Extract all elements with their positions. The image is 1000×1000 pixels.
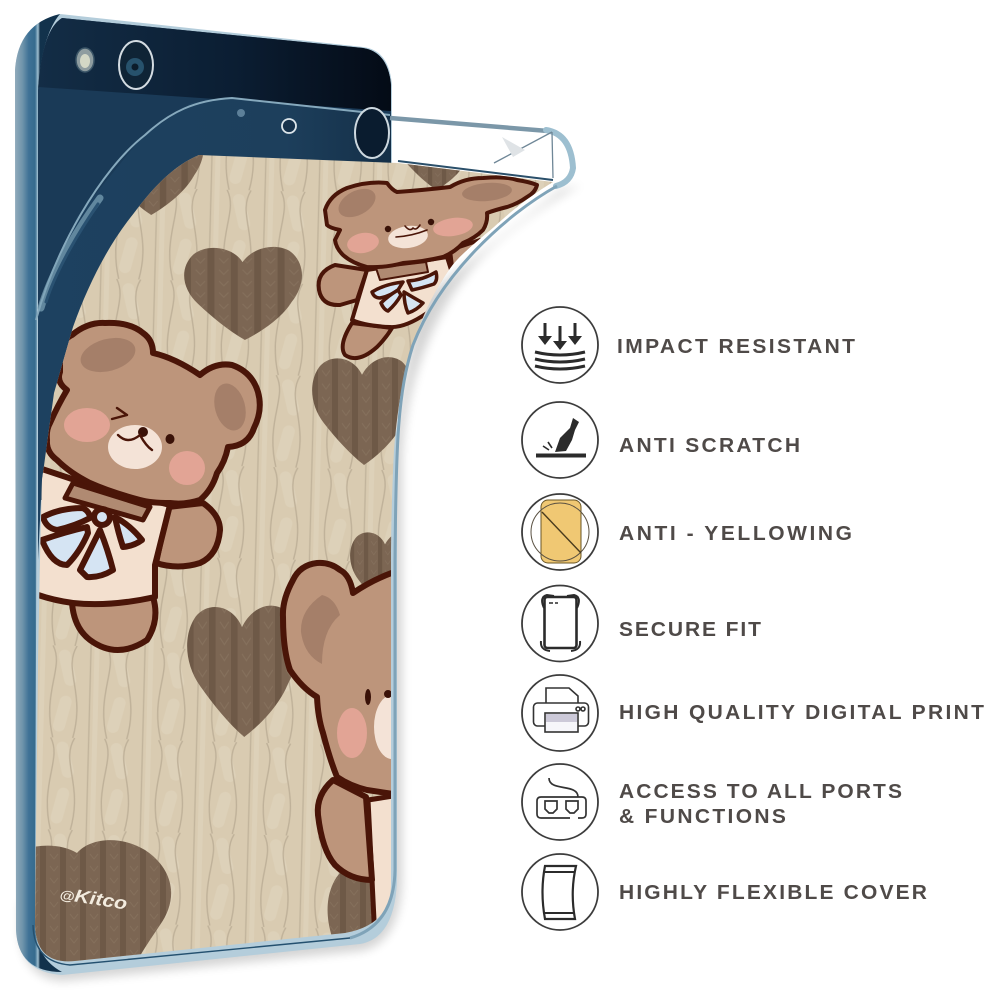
- shirt: [369, 795, 391, 924]
- muzzle: [374, 695, 410, 759]
- leg: [343, 323, 392, 358]
- bear small top right: [319, 177, 537, 358]
- small case hole: [282, 119, 296, 133]
- head: [325, 177, 537, 267]
- corner fold lines: [494, 132, 553, 178]
- heart bottom right: [328, 873, 376, 934]
- phone dark top band: [38, 18, 391, 111]
- icon: scratch: [522, 402, 598, 478]
- feature: secure fit: [522, 586, 761, 662]
- muzzle: [108, 425, 162, 469]
- label: ANTI - YELLOWING: [619, 522, 852, 545]
- flash centre: [80, 54, 90, 68]
- grey fold: [502, 137, 525, 157]
- right arm: [450, 240, 480, 275]
- right edge rim: [350, 186, 557, 938]
- case corner: [546, 130, 573, 186]
- labels: & FUNCTIONS: [619, 805, 786, 828]
- bottom rim: [33, 925, 350, 965]
- ears inner: [338, 189, 376, 217]
- labels: ACCESS TO ALL PORTS: [619, 780, 902, 803]
- heart small right: [350, 532, 392, 584]
- leg: [72, 597, 155, 650]
- brand mark: @Kitco: [58, 883, 129, 914]
- bear large left: [30, 323, 260, 650]
- eyes and nose: [385, 226, 391, 232]
- icon: flexible cover: [522, 854, 598, 930]
- eye: [365, 689, 371, 705]
- label: ANTI SCRATCH: [619, 434, 800, 457]
- camera cut-out: [355, 108, 389, 158]
- feature: impact resistant: [522, 307, 856, 383]
- feature: flexible: [522, 854, 927, 930]
- mouth: [396, 225, 427, 237]
- head: [283, 563, 400, 795]
- phone body lower: [38, 18, 391, 500]
- cheek: [337, 708, 367, 758]
- case print: [35, 155, 553, 962]
- left arm: [319, 265, 367, 305]
- icon: ports: [522, 764, 598, 840]
- heart top right: [408, 164, 460, 187]
- case light dot: [237, 109, 245, 117]
- icon: yellowing: [522, 494, 598, 570]
- cheeks: [347, 232, 379, 254]
- shirt: [30, 465, 170, 604]
- arm: [318, 780, 372, 880]
- bow: [372, 272, 437, 313]
- bow: [42, 508, 142, 577]
- nose: [138, 427, 148, 437]
- side strip: [15, 14, 62, 972]
- camera lens: [119, 41, 153, 89]
- knit background: [35, 155, 553, 962]
- case right and bottom rim: [33, 186, 557, 965]
- label: HIGHLY FLEXIBLE COVER: [619, 881, 927, 904]
- heart bottom left: [30, 840, 171, 965]
- print top edge line: [398, 161, 553, 180]
- cheeks: [64, 408, 110, 442]
- icon: phone fit: [522, 586, 598, 662]
- heart centre lower: [187, 606, 298, 737]
- wink and mouth: [112, 408, 152, 450]
- label: IMPACT RESISTANT: [617, 335, 856, 358]
- heart right: [312, 357, 413, 465]
- feature list: [522, 307, 984, 930]
- label: HIGH QUALITY DIGITAL PRINT: [619, 701, 984, 724]
- phone back: [15, 14, 397, 975]
- bear right partial: [280, 560, 391, 924]
- ears inner: [80, 338, 136, 372]
- case inner tint: [38, 98, 391, 560]
- muzzle: [388, 226, 428, 248]
- case top bar: [390, 118, 548, 131]
- label: SECURE FIT: [619, 618, 761, 641]
- heart centre top: [184, 247, 302, 340]
- head: [47, 323, 260, 504]
- ear inner: [301, 595, 340, 664]
- eye: [166, 434, 174, 444]
- case drop shadow: [20, 185, 582, 981]
- feature: ports: [522, 764, 902, 840]
- side button core: [46, 204, 98, 302]
- phone silhouette rim: [15, 14, 397, 975]
- collar: [65, 483, 150, 520]
- icon: impact: [522, 307, 598, 383]
- labels: [619, 780, 902, 828]
- nose: [384, 690, 392, 698]
- feature: anti scratch: [522, 402, 800, 478]
- arm: [156, 503, 220, 566]
- case top-left highlight: [36, 98, 390, 320]
- heart top left: [139, 155, 203, 215]
- side button moulding: [41, 198, 100, 308]
- icon: printer: [522, 675, 598, 751]
- flash: [76, 48, 94, 72]
- clear case: [36, 98, 573, 560]
- feature: anti yellowing: [522, 494, 852, 570]
- shirt: [352, 257, 452, 327]
- feature: print: [522, 675, 984, 751]
- collar: [376, 262, 428, 280]
